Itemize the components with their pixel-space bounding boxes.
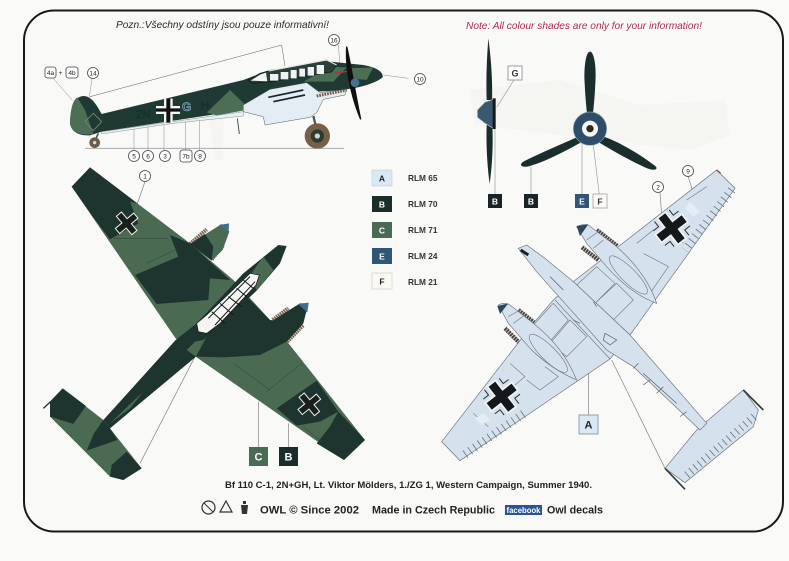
red exhaust mark bbox=[335, 71, 349, 73]
front propeller bbox=[521, 52, 656, 170]
callout 1 bbox=[140, 170, 150, 182]
side view callouts bbox=[45, 34, 426, 162]
underside belly bbox=[102, 112, 243, 134]
colour box B (front propeller): B bbox=[528, 196, 534, 206]
icon: recycling triangle bbox=[220, 501, 232, 512]
callout 7b bbox=[180, 150, 192, 162]
callout 3 bbox=[160, 150, 170, 162]
elevator ribs bbox=[687, 417, 754, 475]
leader lines bbox=[588, 177, 697, 468]
tail mass balance strips bbox=[665, 390, 763, 489]
colour box A: A bbox=[585, 420, 593, 432]
caption: Bf 110 C-1, 2N+GH, Lt. Viktor Mölders, 1./ZG 1, Western Campaign, Summer 1940. bbox=[225, 480, 592, 490]
legend RLM 21 bbox=[372, 273, 438, 289]
colour box G: G bbox=[511, 68, 519, 78]
bottom view aircraft bbox=[442, 170, 763, 489]
colour box G bbox=[508, 66, 522, 80]
callout 3: 3 bbox=[163, 154, 167, 160]
legend RLM 65: RLM 65 bbox=[408, 173, 438, 183]
tailplane bbox=[50, 388, 142, 480]
legend RLM 71: C bbox=[379, 226, 385, 236]
callout 10: 10 bbox=[416, 76, 424, 84]
colour box F bbox=[593, 194, 607, 208]
callout 6 bbox=[142, 150, 154, 162]
wing ribs bbox=[462, 190, 732, 457]
left nacelle bbox=[190, 224, 229, 261]
balkenkreuz left wing bbox=[478, 373, 525, 420]
colour box A bbox=[579, 415, 598, 434]
tailplane dark patches bbox=[50, 388, 142, 480]
right nacelle bbox=[273, 303, 308, 342]
ground line bbox=[85, 147, 344, 150]
icon: bin bbox=[241, 501, 248, 514]
leader lines bbox=[53, 45, 408, 150]
tailplane bbox=[665, 390, 758, 483]
individual letter G: G bbox=[182, 100, 191, 114]
fuselage patches bbox=[110, 257, 273, 423]
callout 8: 8 bbox=[198, 154, 202, 160]
callout 5: 5 bbox=[132, 154, 136, 160]
top view aircraft bbox=[43, 167, 365, 480]
legend RLM 21: RLM 21 bbox=[408, 277, 438, 287]
lower nacelle bbox=[498, 303, 577, 380]
propeller side view bbox=[346, 47, 361, 119]
tail wheel bbox=[89, 133, 100, 148]
propeller views bbox=[477, 38, 656, 195]
colour box B bbox=[279, 447, 298, 466]
legend RLM 70: RLM 70 bbox=[408, 199, 438, 209]
colour box B (front propeller) bbox=[524, 194, 538, 208]
colour box B (side propeller): B bbox=[492, 196, 498, 206]
legend RLM 65 bbox=[372, 170, 438, 186]
top balkenkreuz left wing bbox=[110, 206, 144, 240]
canopy bbox=[197, 273, 259, 333]
antenna wire bbox=[90, 45, 285, 97]
callout 16 bbox=[328, 34, 340, 46]
legend RLM 24: RLM 24 bbox=[408, 251, 438, 261]
colour box C: C bbox=[255, 452, 263, 464]
callout 2: 2 bbox=[656, 184, 660, 192]
callout 7b: 7b bbox=[182, 154, 190, 160]
note: English: Note: All colour shades are only for your information! bbox=[466, 21, 702, 32]
callout 4a bbox=[45, 67, 56, 78]
legend RLM 24 bbox=[372, 248, 438, 264]
canopy bbox=[248, 60, 337, 83]
pale code letters bbox=[475, 202, 700, 425]
callout 10 bbox=[414, 74, 426, 84]
wing panel lines bbox=[113, 238, 323, 443]
colour box E bbox=[575, 194, 589, 208]
footer icons bbox=[202, 501, 248, 514]
colour box C bbox=[249, 447, 268, 466]
upper nacelle bbox=[577, 224, 657, 303]
leader lines bbox=[495, 78, 599, 195]
colour box F: F bbox=[597, 196, 603, 206]
callout 1: 1 bbox=[143, 174, 147, 180]
callout 14: 14 bbox=[89, 70, 97, 78]
wing bbox=[72, 167, 365, 460]
footer owl decals: Owl decals bbox=[547, 504, 603, 516]
colour box B (side propeller) bbox=[488, 194, 502, 208]
callout 9 bbox=[682, 166, 694, 176]
fuselage camouflage patches bbox=[70, 67, 373, 134]
show-through ghost of reverse side bbox=[205, 80, 730, 160]
legend RLM 65: A bbox=[379, 174, 385, 184]
footer made in: Made in Czech Republic bbox=[372, 504, 495, 516]
side propeller bbox=[477, 38, 496, 184]
side view aircraft: H bbox=[201, 98, 209, 112]
wing dark patches bbox=[72, 167, 365, 460]
fuselage bbox=[103, 245, 287, 428]
wing panels bbox=[473, 187, 707, 427]
leader lines bbox=[137, 182, 289, 463]
colour box E: E bbox=[579, 196, 585, 206]
top balkenkreuz right wing bbox=[292, 387, 326, 421]
nacelle exhausts bbox=[505, 230, 617, 343]
callout 6: 6 bbox=[146, 154, 150, 160]
legend RLM 71 bbox=[372, 222, 438, 238]
legend RLM 71: RLM 71 bbox=[408, 225, 438, 235]
fuselage details bbox=[550, 277, 687, 417]
legend RLM 21: F bbox=[379, 276, 385, 286]
callout 4a: 4a bbox=[47, 70, 54, 77]
fuselage bbox=[70, 62, 383, 135]
balkenkreuz side bbox=[156, 99, 180, 123]
side view aircraft bbox=[53, 45, 408, 150]
callout 14 bbox=[88, 68, 98, 78]
callout 9: 9 bbox=[686, 168, 690, 176]
tail swastika bbox=[85, 113, 102, 131]
legend RLM 70 bbox=[372, 196, 438, 212]
wing bbox=[442, 170, 735, 461]
legend RLM 24: E bbox=[379, 252, 385, 262]
icon: no children bbox=[202, 501, 215, 514]
callout 16: 16 bbox=[330, 38, 338, 44]
colour box B: B bbox=[285, 452, 293, 464]
callout 2 bbox=[652, 182, 664, 192]
engine nacelle underside bbox=[243, 83, 347, 125]
balkenkreuz right wing bbox=[648, 205, 695, 252]
plus sign: + bbox=[59, 70, 63, 77]
footer owl copyright: OWL © Since 2002 bbox=[260, 504, 359, 516]
callout 4b bbox=[66, 67, 78, 78]
colour legend bbox=[372, 170, 438, 289]
facebook badge: facebook bbox=[506, 505, 541, 515]
left nacelle exhaust bbox=[190, 229, 223, 259]
tail tip bbox=[43, 402, 51, 408]
note: Czech: Pozn.:Všechny odstíny jsou pouze informativní! bbox=[116, 19, 329, 31]
right nacelle exhaust bbox=[273, 308, 303, 342]
fuselage bbox=[518, 245, 707, 430]
callout 4b: 4b bbox=[68, 70, 76, 77]
callout 5 bbox=[128, 150, 140, 162]
callout 8 bbox=[194, 150, 206, 162]
legend RLM 70: B bbox=[379, 200, 385, 210]
code letters: 2N bbox=[136, 107, 151, 121]
main wheel bbox=[305, 116, 330, 149]
